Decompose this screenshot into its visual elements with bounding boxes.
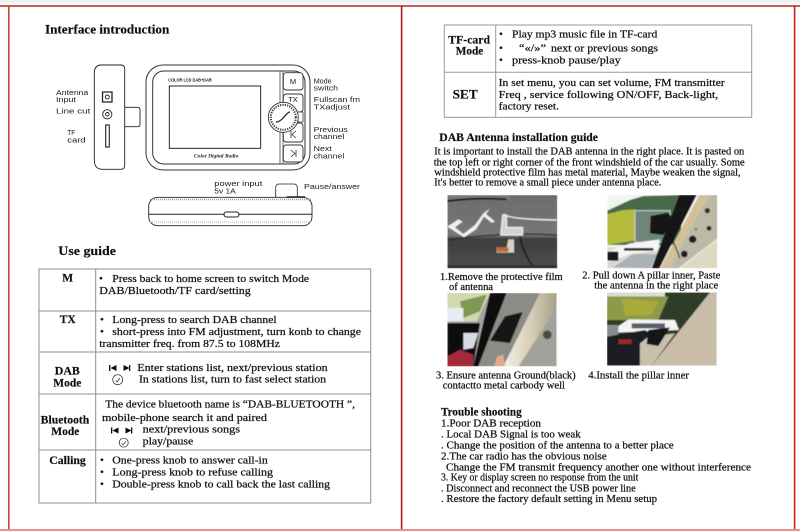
row: M: DAB/Bluetooth/TF card/setting xyxy=(99,285,251,297)
side view labels xyxy=(56,88,91,145)
bottom view labels xyxy=(214,179,361,195)
table: use guide xyxy=(39,269,371,503)
row: TF-card Mode xyxy=(448,29,658,67)
text block: antenna intro: It is important to install the DAB antenna in the right place. It is pasted on xyxy=(434,146,745,158)
caption text: photos 1 and 2: of antenna xyxy=(449,281,493,293)
device front view xyxy=(146,65,310,170)
front view labels: Mode xyxy=(314,76,332,85)
caption text: photos 3 and 4: 4.Install the pillar inner xyxy=(588,369,689,381)
row: TX: transmitter freq. from 87.5 to 108MHz xyxy=(99,338,280,350)
row: M xyxy=(62,273,309,297)
device side view xyxy=(94,65,140,169)
table grid xyxy=(39,269,371,503)
text block: trouble shooting: 2.The car radio has the obvious noise xyxy=(441,450,607,462)
brand label: COLOR LCD DAB+DAB xyxy=(168,78,212,84)
row: M: Press back to home screen to switch Mode xyxy=(112,273,309,285)
text block: trouble shooting: . Restore the factory default setting in Menu setup xyxy=(441,493,657,505)
row: TF-card Mode: • xyxy=(499,29,503,41)
button TX: TX xyxy=(288,95,298,104)
table grid xyxy=(444,25,752,117)
row: TX: • xyxy=(100,314,104,326)
row: Bluetooth Mode: Mode xyxy=(51,426,79,438)
icon: previous and next xyxy=(109,365,130,371)
row: Bluetooth Mode: Bluetooth xyxy=(41,415,90,427)
row: Calling: Calling xyxy=(49,455,86,467)
row: SET: factory reset. xyxy=(499,101,559,113)
front view labels: TXadjust xyxy=(314,102,351,111)
icon: previous and next xyxy=(111,428,132,434)
front view labels: channel xyxy=(314,132,345,141)
row: TX: • xyxy=(100,326,104,338)
row: TF-card Mode: • xyxy=(499,43,503,55)
front screen xyxy=(169,86,261,148)
row: Calling: • xyxy=(100,478,104,490)
text block: antenna intro xyxy=(434,146,745,189)
heading: DAB Antenna installation guide: DAB Antenna installation guide xyxy=(439,132,598,144)
row: M: • xyxy=(99,273,103,285)
row: Bluetooth Mode: mobile-phone search it and paired xyxy=(102,412,268,424)
icon: knob xyxy=(119,438,128,447)
side view labels: TF xyxy=(67,128,76,137)
text block: trouble shooting: . Disconnect and reconnect the USB power line xyxy=(441,482,636,494)
text block: antenna intro: It's better to remove a small piece under antenna place. xyxy=(434,177,662,189)
row: Bluetooth Mode: next/previous songs xyxy=(143,424,240,436)
row: SET xyxy=(453,77,725,113)
diagram: device interface xyxy=(56,65,361,226)
photo 4: installed pillar xyxy=(607,292,717,366)
model label: Color Digital Radio xyxy=(194,154,239,160)
heading: trouble shooting: Trouble shooting xyxy=(441,406,522,418)
row: SET: In set menu, you can set volume, FM transmitter xyxy=(499,77,725,89)
row: TX: TX xyxy=(60,314,76,326)
row: Calling: • xyxy=(100,455,104,467)
bottom view labels: 5v 1A xyxy=(214,186,236,195)
text block: antenna intro: the top left or right corner of the front windshield of the car usually. Some xyxy=(434,156,745,168)
front view labels: Fullscan fm xyxy=(314,95,360,104)
row: DAB Mode: DAB xyxy=(55,365,80,377)
caption text: photos 1 and 2: the antenna in the right place xyxy=(594,280,718,292)
button next xyxy=(283,145,303,162)
row: TF-card Mode: press-knob pause/play xyxy=(512,55,621,67)
rotary knob xyxy=(268,102,303,132)
table: TF-card and SET xyxy=(444,25,752,117)
row: M: M xyxy=(62,273,73,285)
front view labels: Previous xyxy=(314,125,348,134)
text block: trouble shooting xyxy=(441,406,751,505)
side view labels: card xyxy=(67,136,86,145)
row: TX: short-press into FM adjustment, turn konb to change xyxy=(112,326,361,338)
button previous xyxy=(283,123,303,142)
bottom view labels: power input xyxy=(214,179,263,188)
row: Calling: One-press knob to answer call-in xyxy=(112,455,268,467)
side view labels: Antenna xyxy=(56,88,89,97)
row: TF-card Mode: Play mp3 music file in TF-card xyxy=(512,29,658,41)
text block: trouble shooting: 1.Poor DAB reception xyxy=(441,418,541,430)
row: TX: Long-press to search DAB channel xyxy=(112,314,277,326)
row: Bluetooth Mode: play/pause xyxy=(143,435,193,447)
row: DAB Mode: Mode xyxy=(53,378,81,390)
row: TF-card Mode: Mode xyxy=(456,45,483,57)
text block: trouble shooting: 3. Key or display screen no response from the unit xyxy=(441,471,638,483)
photo 3: antenna ground contact xyxy=(447,293,557,366)
row: TF-card Mode: next or previous songs xyxy=(551,43,658,55)
heading: Interface introduction: Interface introduction xyxy=(45,21,170,36)
row: DAB Mode xyxy=(53,362,328,390)
caption text: photos 1 and 2 xyxy=(440,269,720,293)
photo 2: antenna on A pillar xyxy=(607,195,717,268)
caption text: photos 3 and 4 xyxy=(436,369,689,392)
caption text: photos 1 and 2: 1.Remove the protective film xyxy=(440,271,563,283)
button M xyxy=(283,73,303,90)
row: DAB Mode: Enter stations list, next/previous station xyxy=(137,362,328,374)
row: TX xyxy=(60,314,361,350)
icon: knob xyxy=(113,375,123,385)
front view labels: Next xyxy=(314,144,333,153)
row: Calling xyxy=(49,455,331,490)
photo 1: protective film xyxy=(447,195,557,268)
row: Bluetooth Mode xyxy=(41,399,355,447)
row: SET: SET xyxy=(453,87,478,102)
button TX xyxy=(283,94,303,112)
heading: Use guide: Use guide xyxy=(58,243,116,258)
row: Calling: Long-press knob to refuse calling xyxy=(112,466,274,478)
side view labels: Input xyxy=(56,95,77,104)
row: TF-card Mode: • xyxy=(499,55,503,67)
button M: M xyxy=(290,77,296,86)
front view labels: switch xyxy=(314,84,338,93)
text block: trouble shooting: . Change the position of the antenna to a better place xyxy=(441,440,674,452)
row: SET: Freq , service following ON/OFF, Back-light, xyxy=(499,89,719,101)
text block: antenna intro: windshield protective film has metal material, Maybe weaken the signal, xyxy=(434,167,741,179)
front view labels: channel xyxy=(314,152,345,161)
device bottom view xyxy=(149,184,312,226)
caption text: photos 3 and 4: 3. Ensure antenna Ground(black) xyxy=(436,369,576,381)
row: Calling: Double-press knob to call back the last calling xyxy=(112,478,331,490)
row: TF-card Mode: TF-card xyxy=(448,34,491,46)
caption text: photos 1 and 2: 2. Pull down A pillar inner, Paste xyxy=(582,269,720,281)
side view labels: Line cut xyxy=(56,106,91,115)
text block: trouble shooting: Change the FM transmit frequency another one without interference xyxy=(446,461,751,473)
bottom view labels: Pause/answer xyxy=(304,182,361,191)
text block: trouble shooting: . Local DAB Signal is too weak xyxy=(441,428,581,440)
row: Calling: • xyxy=(100,466,104,478)
row: TF-card Mode: “«/»” xyxy=(519,43,546,55)
front view labels xyxy=(314,76,360,161)
caption text: photos 3 and 4: contactto metal carbody well xyxy=(443,380,565,392)
row: DAB Mode: In stations list, turn to fast select station xyxy=(139,374,327,386)
row: Bluetooth Mode: The device bluetooth name is “DAB-BLUETOOTH ”, xyxy=(105,399,355,411)
